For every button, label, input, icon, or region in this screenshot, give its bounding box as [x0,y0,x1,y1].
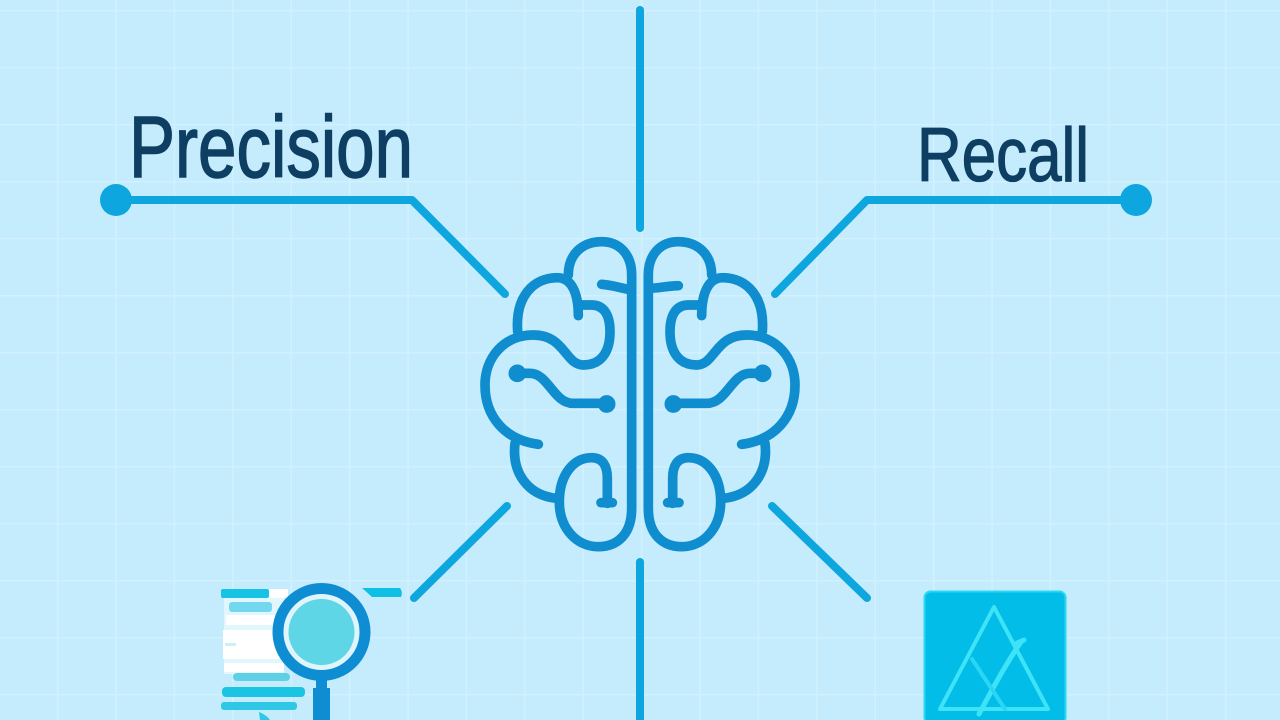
connector: top vertical [636,10,644,228]
heading: Precision: Precision [129,99,413,196]
connector: Recall to brain [775,184,1152,294]
magnifier lens [284,594,360,670]
icon: document with magnifying glass [221,588,402,720]
connector: Precision to brain [100,184,505,294]
magnifier ring [278,588,365,676]
magnifier handle [313,678,330,720]
connector: lower left [414,506,507,598]
icon: triangle panel [924,592,1066,720]
connector: lower right [772,506,867,598]
document text bars [221,589,305,720]
left hemisphere [485,242,632,547]
triangle outlines [940,607,1048,714]
document page [223,589,288,674]
connector: bottom vertical [636,562,644,720]
heading: Recall: Recall [917,113,1089,198]
right hemisphere [648,242,795,547]
icon: brain [485,242,795,547]
dash beside magnifier [362,588,402,597]
